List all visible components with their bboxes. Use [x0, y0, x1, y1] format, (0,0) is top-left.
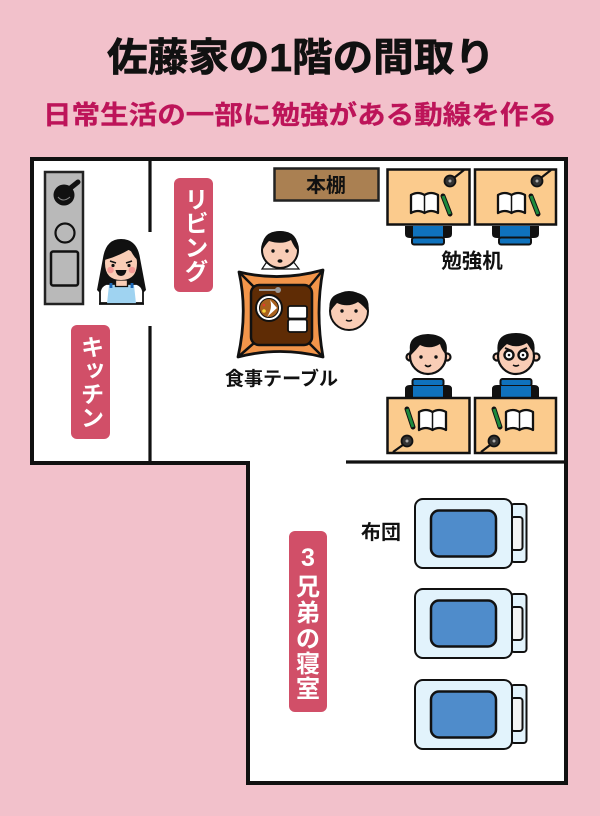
label: brothers' bedroom: 3 [301, 544, 315, 572]
icon: futon 3 [415, 680, 526, 749]
study desk bottom left [388, 398, 470, 453]
label: bookshelf [274, 168, 378, 200]
label: brothers' bedroom [289, 531, 327, 712]
label: brothers' bedroom: の [296, 626, 320, 653]
icon: dining table with meal [238, 270, 323, 357]
label: kitchen [71, 325, 110, 439]
label: futon: 布団 [361, 521, 401, 544]
label: brothers' bedroom: 兄 [296, 574, 320, 601]
label: bookshelf: 本棚 [306, 174, 346, 197]
label: kitchen: キッチン [78, 335, 104, 429]
label: living [174, 178, 213, 292]
label: study desks: 勉強机 [441, 250, 503, 273]
label: brothers' bedroom: 寝 [296, 651, 320, 678]
label: dining table: 食事テーブル [225, 367, 338, 390]
icon: mother in apron [97, 239, 146, 304]
label: brothers' bedroom: 室 [296, 676, 320, 703]
icon: futon 2 [415, 589, 526, 658]
label: brothers' bedroom: 弟 [296, 600, 320, 627]
icon: person at table top [262, 231, 299, 269]
study desk top right [475, 170, 556, 244]
study desk bottom right [475, 398, 556, 453]
label: living: リビング [180, 187, 207, 283]
icon: boy with glasses at desk right [492, 333, 540, 397]
icon: boy at desk left [405, 334, 452, 397]
floor plan walls [32, 159, 566, 783]
icon: futon 1 [415, 499, 526, 568]
title: 佐藤家の1階の間取り [107, 37, 495, 80]
subtitle: 日常生活の一部に勉強がある動線を作る [43, 100, 557, 130]
study desk top left [388, 170, 470, 244]
icon: kitchen stove [45, 172, 83, 304]
icon: person at table right [329, 292, 369, 330]
